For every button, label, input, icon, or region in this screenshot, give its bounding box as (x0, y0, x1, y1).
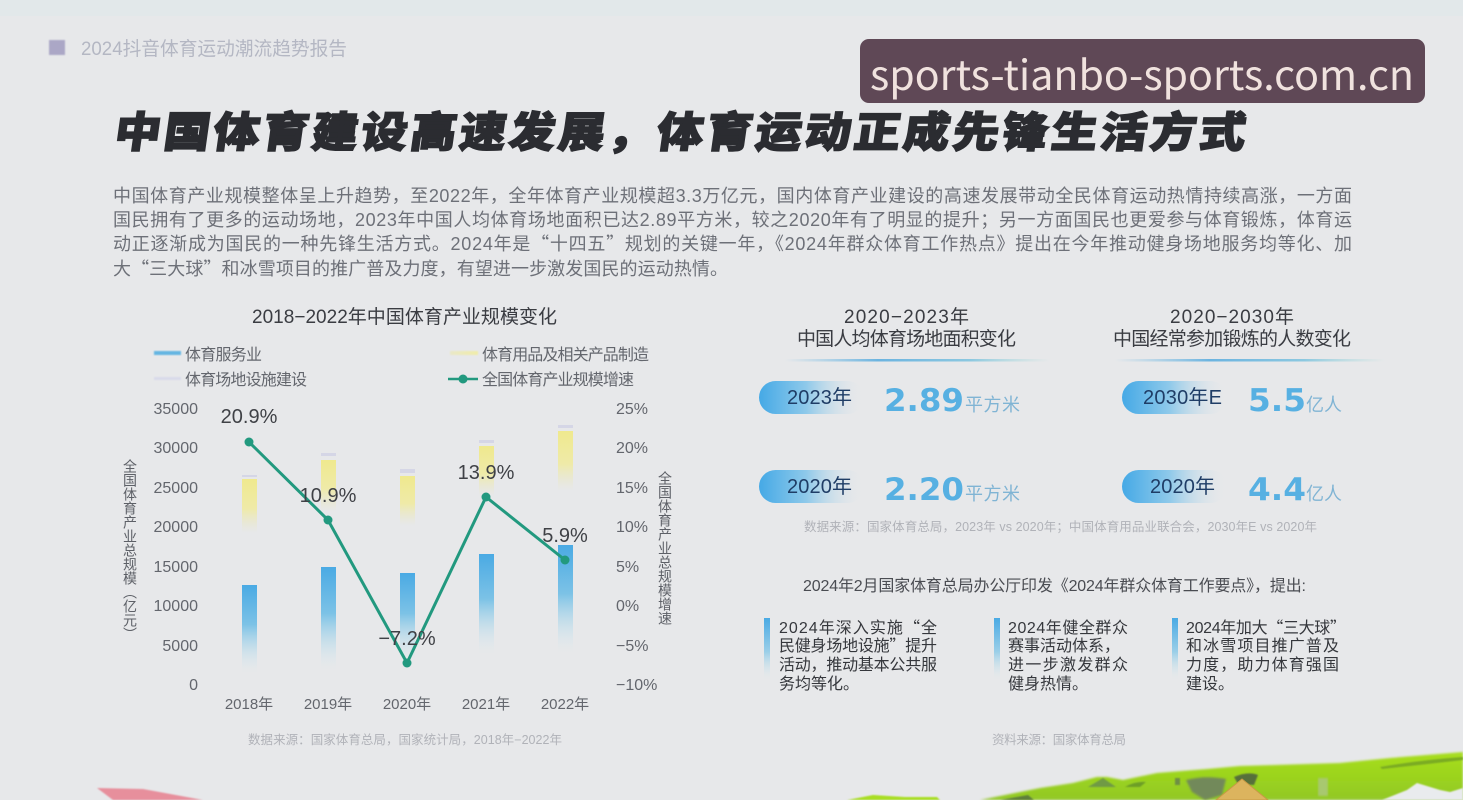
intro paragraph: 中国体育产业规模整体呈上升趋势，至2022年，全年体育产业规模超3.3万亿元，国内体育产业建设的高速发展带动全民体育运动热情持续高涨，一方面 (113, 186, 1352, 206)
policy item 2: 健身热情。 (1008, 675, 1088, 693)
row: 2030E: 亿人 (1306, 395, 1342, 415)
area heading: 2020−2023年 (844, 306, 969, 328)
policy item 2 (994, 618, 1128, 693)
stacked bars (242, 425, 573, 673)
policy item 2: 赛事活动体系， (1008, 636, 1120, 655)
policy item 1: 2024年深入实施“全 (779, 614, 937, 638)
row: 2020: 2.20 (884, 472, 964, 508)
policy item 3: 建设。 (1186, 675, 1234, 693)
policy item 1: 务均等化。 (779, 675, 859, 693)
chart heading: 2018−2022年中国体育产业规模变化 (252, 306, 557, 328)
row: 2023: 2023年 (787, 386, 852, 409)
chart source: 数据来源：国家体育总局，国家统计局，2018年−2022年 (248, 732, 562, 747)
policy item 3 (1172, 614, 1346, 693)
watermark badge: sports-tianbo-sports.com.cn (870, 42, 1414, 102)
row: 2023: 平方米 (965, 395, 1020, 415)
left axis labels: 5000 (162, 638, 198, 655)
policy item 1: 活动，推动基本公共服 (779, 656, 937, 674)
row: 2023: 2.89 (884, 383, 964, 419)
growth rate data labels: −7.2% (378, 628, 436, 650)
exercisers heading: 2020−2030年 (1170, 306, 1294, 328)
illustration: grass hills with tent (847, 752, 1463, 800)
growth rate data labels: 10.9% (300, 485, 357, 507)
growth rate data labels (221, 406, 588, 650)
title: 中国体育建设高速发展，体育运动正成先锋生活方式 (111, 99, 1251, 159)
year labels: 2018年 (225, 696, 273, 713)
year labels: 2019年 (304, 696, 352, 713)
row: 2030E (1122, 381, 1342, 419)
left axis title: 全国体育产业总规模（亿元） (120, 458, 140, 641)
stats source: 数据来源：国家体育总局，2023年 vs 2020年；中国体育用品业联合会，2030年E vs 2020年 (804, 519, 1317, 534)
intro paragraph: 动正逐渐成为国民的一种先锋生活方式。2024年是“十四五”规划的关键一年，《2024年群众体育工作热点》提出在今年推动健身场地服务均等化、加 (113, 230, 1352, 256)
policy item 2: 2024年健全群众 (1008, 619, 1128, 637)
year labels: 2022年 (541, 696, 589, 713)
row: 2020: 2020年 (1150, 475, 1215, 498)
policy item 3: 力度，助力体育强国 (1186, 656, 1339, 674)
chart legend: 体育用品及相关产品制造 (482, 346, 649, 364)
policy item 3: 和冰雪项目推广普及 (1186, 637, 1339, 655)
report name: 2024抖音体育运动潮流趋势报告 (81, 38, 347, 60)
right axis labels: 0% (616, 598, 639, 615)
area heading: 中国人均体育场地面积变化 (797, 328, 1016, 350)
chart legend: 体育服务业 (185, 346, 262, 364)
panel: industry scale chart (120, 306, 675, 747)
panel: sports area per capita (759, 306, 1050, 508)
chart legend: 体育场地设施建设 (185, 371, 307, 389)
policy source: 资料来源：国家体育总局 (992, 732, 1126, 747)
exercisers heading: 中国经常参加锻炼的人数变化 (1113, 328, 1351, 350)
row: 2030E: 2030年E (1143, 386, 1222, 409)
policy item 2: 进一步激发群众 (1008, 656, 1128, 674)
left axis labels: 35000 (154, 401, 198, 418)
year labels: 2020年 (383, 696, 431, 713)
left axis labels: 15000 (154, 559, 198, 576)
right axis labels: −5% (616, 638, 648, 655)
row: 2020: 平方米 (965, 484, 1020, 504)
right axis labels (616, 401, 657, 694)
panel: regular exercisers (1113, 306, 1385, 508)
right axis labels: 5% (616, 559, 639, 576)
growth rate data labels: 20.9% (221, 406, 278, 428)
icon: header square (49, 40, 65, 55)
policy item 3: 2024年加大“三大球” (1186, 614, 1346, 638)
row: 2030E: 5.5 (1248, 383, 1306, 419)
right axis labels: 25% (616, 401, 648, 418)
year labels: 2021年 (462, 696, 510, 713)
growth rate data labels: 5.9% (542, 525, 588, 547)
row: 2020 (759, 470, 1020, 508)
illustration: pink shape (97, 788, 203, 800)
row: 2023 (759, 381, 1020, 419)
header tag (49, 38, 347, 60)
exercisers heading (1113, 306, 1351, 350)
policy item 1: 民健身场地设施”提升 (779, 632, 937, 656)
policy heading: 2024年2月国家体育总局办公厅印发《2024年群众体育工作要点》，提出: (803, 577, 1306, 595)
row: 2020: 亿人 (1306, 484, 1342, 504)
chart legend (154, 346, 649, 389)
left axis labels (154, 401, 198, 694)
growth rate line (244, 438, 570, 668)
icon: tent (1216, 779, 1268, 800)
row: 2020 (1122, 470, 1342, 508)
row: 2020: 4.4 (1248, 472, 1306, 508)
left axis labels: 25000 (154, 480, 198, 497)
intro paragraph: 国民拥有了更多的运动场地，2023年中国人均体育场地面积已达2.89平方米，较之2020年有了明显的提升；另一方面国民也更爱参与体育锻炼，体育运 (113, 210, 1352, 230)
left axis labels: 30000 (154, 440, 198, 457)
growth rate data labels: 13.9% (458, 462, 515, 484)
right axis labels: 10% (616, 519, 648, 536)
right axis labels: 20% (616, 440, 648, 457)
intro paragraph: 大“三大球”和冰雪项目的推广普及力度，有望进一步激发国民的运动热情。 (113, 255, 728, 281)
area heading (797, 306, 1016, 350)
left axis labels: 10000 (154, 598, 198, 615)
right axis title: 全国体育产业总规模增速 (655, 470, 675, 626)
row: 2020: 2020年 (787, 475, 852, 498)
left axis labels: 20000 (154, 519, 198, 536)
year labels (225, 696, 589, 713)
intro paragraph (113, 186, 1352, 281)
right axis labels: −10% (616, 677, 657, 694)
policy item 1 (764, 614, 937, 693)
right axis labels: 15% (616, 480, 648, 497)
left axis labels: 0 (189, 677, 198, 694)
chart legend: 全国体育产业规模增速 (482, 371, 634, 389)
